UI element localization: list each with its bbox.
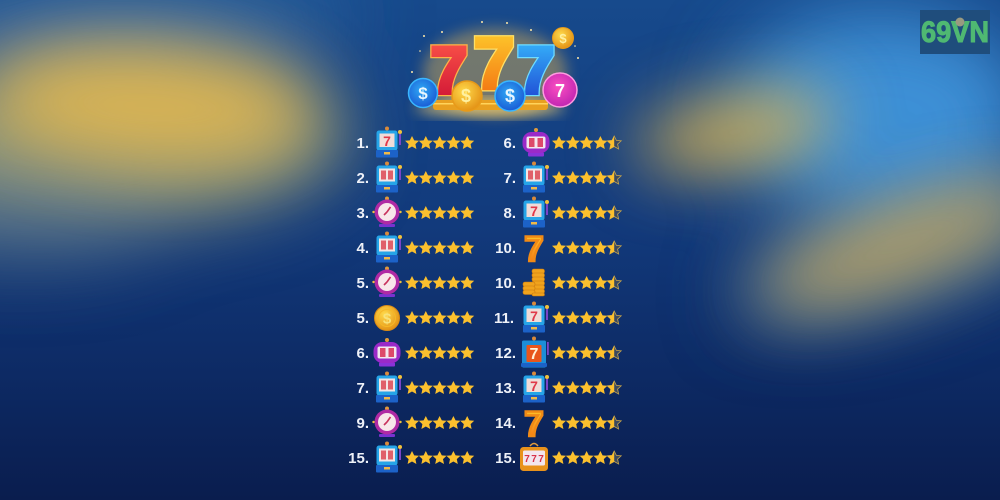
orange seven: 7	[474, 24, 514, 104]
row 10	[495, 444, 621, 471]
row 7: 12.	[495, 345, 516, 362]
row 5: 5.	[356, 275, 369, 292]
row 3	[356, 196, 474, 227]
row 6	[494, 302, 621, 332]
row 5: 10.	[495, 275, 516, 292]
blue seven: 7	[518, 33, 554, 107]
blue seven: 7	[518, 33, 554, 107]
row 5	[495, 269, 621, 296]
row 2: 7.	[503, 170, 516, 187]
row 3: 8.	[503, 205, 516, 222]
row 7: 6.	[356, 345, 369, 362]
row 9	[356, 406, 474, 437]
row 8	[495, 372, 621, 402]
gold coin base	[433, 100, 548, 110]
ratings: left column	[348, 126, 474, 472]
blue dollar coin right: $	[505, 86, 515, 106]
row 9: 14.	[495, 415, 516, 432]
row 2	[503, 162, 621, 192]
gold dollar coin	[452, 81, 482, 111]
row 9: 9.	[356, 415, 369, 432]
row 2: 2.	[356, 170, 369, 187]
row 1: 6.	[503, 135, 516, 152]
pink seven coin	[543, 73, 577, 107]
row 6: 5.	[356, 310, 369, 327]
row 6: 11.	[494, 310, 514, 327]
row 1	[356, 126, 474, 158]
blue dollar coin left: $	[418, 84, 428, 103]
row 1: 1.	[356, 135, 369, 152]
row 8: 7.	[356, 380, 369, 397]
red seven: 7	[431, 33, 467, 107]
red seven: 7	[431, 33, 467, 107]
row 4	[495, 230, 621, 269]
row 3: 3.	[356, 205, 369, 222]
row 4: 4.	[356, 240, 369, 257]
ratings: right column	[494, 128, 621, 471]
row 4	[356, 232, 474, 262]
pink seven coin: 7	[555, 81, 565, 101]
row 6	[356, 306, 474, 330]
row 10: 15.	[495, 450, 516, 467]
row 10: 15.	[348, 450, 369, 467]
hero: triple seven with coins	[408, 21, 579, 116]
logo: 69VN badge: 69VN	[921, 16, 989, 49]
small gold coin: $	[559, 31, 567, 46]
row 10	[348, 442, 474, 472]
row 9	[495, 405, 621, 444]
orange seven: 7	[474, 24, 514, 104]
small gold coin	[552, 28, 574, 48]
row 1	[503, 128, 621, 156]
blue dollar coin left	[408, 78, 438, 108]
row 5	[356, 266, 474, 297]
row 8: 13.	[495, 380, 516, 397]
row 8	[356, 372, 474, 402]
row 7	[495, 336, 621, 368]
row 7	[356, 338, 474, 366]
row 4: 10.	[495, 240, 516, 257]
row 3	[503, 196, 621, 228]
logo: 69VN badge	[920, 10, 990, 54]
gold dollar coin: $	[461, 86, 471, 106]
sparkles	[411, 21, 579, 73]
row 2	[356, 162, 474, 192]
blue dollar coin right	[495, 81, 525, 111]
